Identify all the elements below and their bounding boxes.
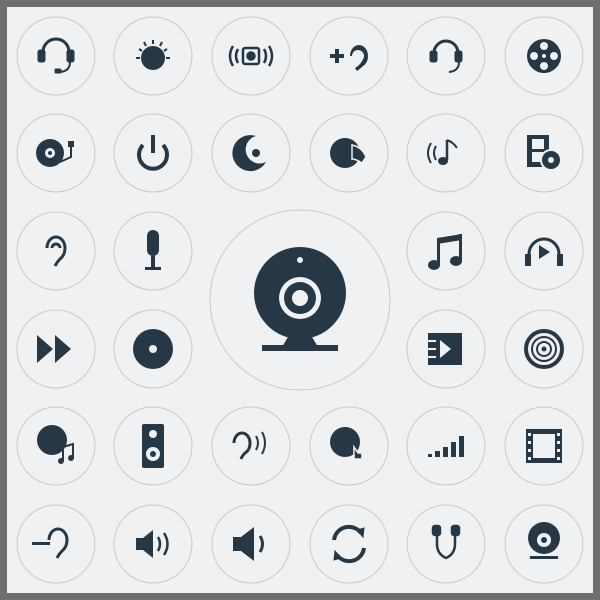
- icon: microphone: [145, 230, 161, 270]
- icon: film with reel: [527, 135, 561, 170]
- icon: volume high: [136, 530, 168, 558]
- icon: webcam big: [254, 247, 346, 351]
- icon: playlist play: [428, 333, 462, 365]
- icon: power: [139, 135, 167, 169]
- icon: film strip: [526, 429, 562, 463]
- icon: vinyl: [526, 331, 562, 367]
- icon: hand touch ball: [330, 138, 366, 168]
- icon: brightness knob: [136, 40, 170, 70]
- icon: signal bars: [428, 436, 464, 457]
- icon: turntable: [36, 139, 74, 167]
- icon: headset 2: [430, 41, 462, 72]
- icon: ball hand: [330, 427, 362, 459]
- icon: ear minus: [32, 529, 67, 558]
- icon: refresh: [334, 527, 364, 561]
- icon: music ball: [37, 425, 74, 464]
- icon: speaker vibration: [230, 46, 272, 66]
- icon: music note: [428, 234, 462, 270]
- icon: ear sound: [234, 432, 265, 459]
- icon: earphones: [433, 526, 459, 558]
- icon: headphones play: [525, 239, 563, 266]
- icon: volume: [233, 527, 262, 561]
- icon: plus ear: [330, 45, 368, 71]
- icon: disc: [133, 329, 173, 369]
- icon: headset: [38, 39, 74, 73]
- icon: music with waves: [428, 140, 457, 165]
- icon: film reel: [527, 39, 561, 73]
- icon: speaker box: [142, 424, 164, 468]
- icon: ear: [47, 237, 65, 266]
- icon: fast forward: [37, 335, 71, 363]
- icon: webcam small: [528, 522, 560, 559]
- icon: crescent eye: [232, 135, 266, 171]
